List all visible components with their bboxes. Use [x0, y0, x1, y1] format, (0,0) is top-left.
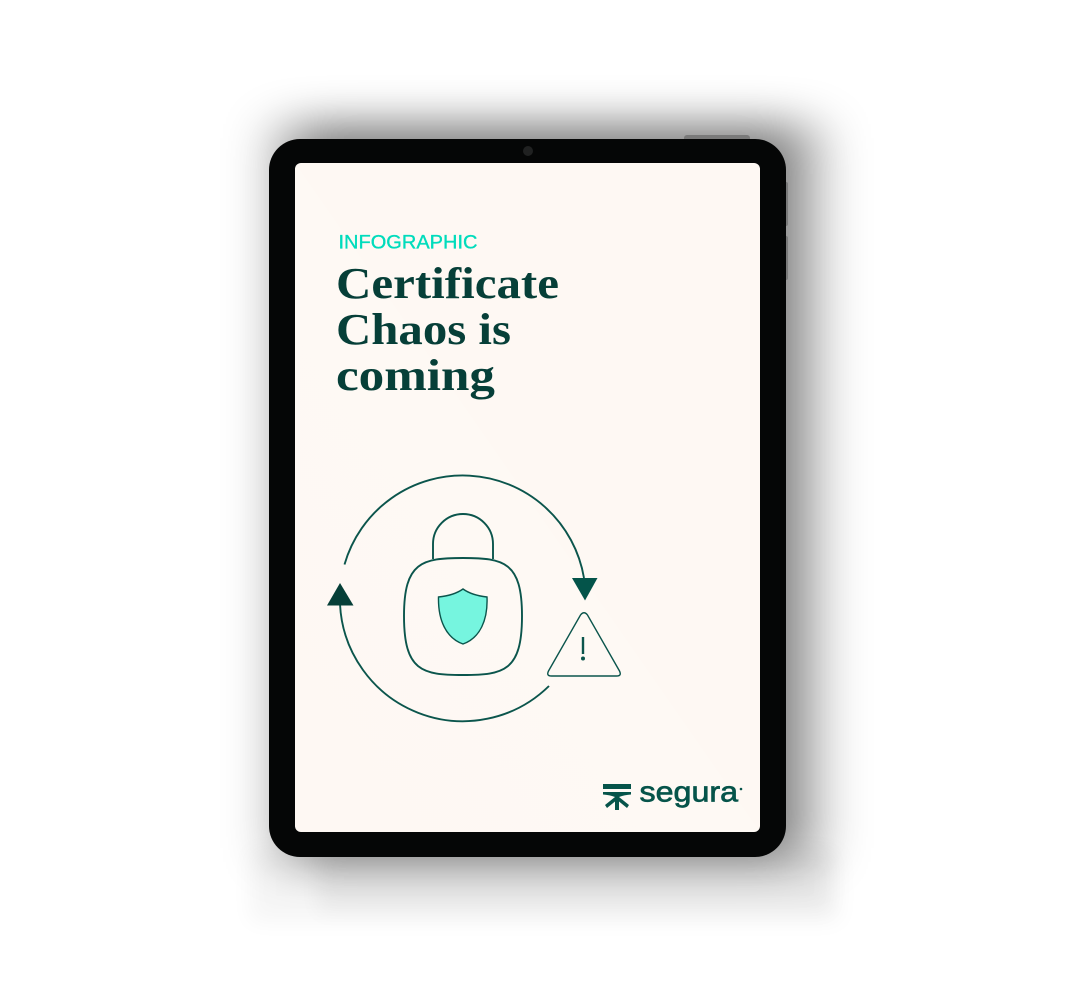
tablet: screen [295, 163, 760, 832]
registered mark [740, 788, 742, 790]
illustration: certificate cycle [327, 475, 620, 721]
icon: warning triangle [548, 613, 620, 676]
logo mark [603, 784, 631, 810]
lower cycle arc [340, 604, 549, 721]
eyebrow label: INFOGRAPHIC [338, 232, 478, 254]
logo: segura [603, 776, 742, 810]
title: Chaos is [336, 305, 511, 354]
tablet: camera [523, 146, 533, 156]
logo wordmark: segura [640, 776, 739, 808]
title: Certificate [336, 259, 559, 308]
icon: shield [438, 589, 487, 644]
icon: padlock [404, 514, 522, 675]
arrowhead: up [327, 583, 354, 606]
tablet: hardware buttons [684, 135, 788, 280]
device drop shadow [250, 124, 840, 922]
tablet: body [269, 139, 786, 857]
upper cycle arc [344, 475, 584, 578]
title [336, 259, 559, 400]
arrowhead: down [572, 578, 598, 600]
title: coming [336, 351, 495, 400]
